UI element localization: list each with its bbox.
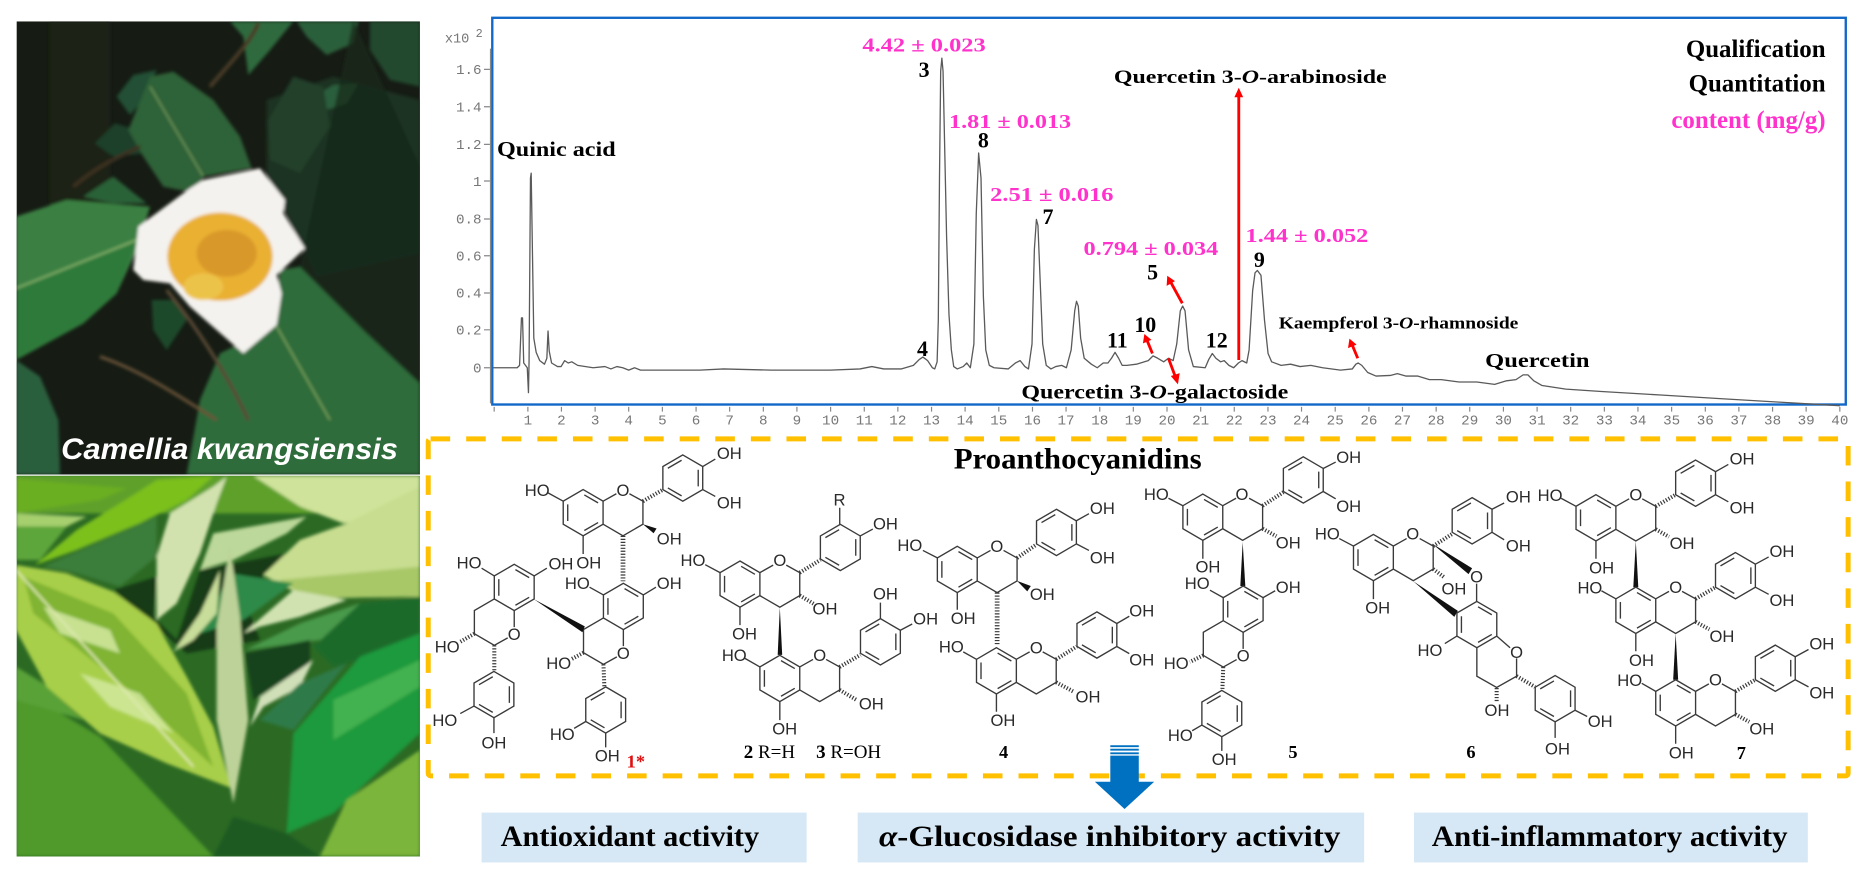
structure 6: OH (1442, 579, 1466, 598)
structure 2 and 3: OH (813, 599, 837, 618)
x axis: 36 (1697, 414, 1714, 430)
structure 1: OH (576, 554, 601, 573)
structure 5: OH (1212, 750, 1237, 769)
x axis: 25 (1327, 414, 1344, 430)
structure 1 (432, 444, 742, 772)
y axis: 1 (473, 175, 482, 191)
compound labels: 7 (1043, 204, 1054, 229)
structure 5: OH (1276, 534, 1301, 553)
x axis: 40 (1831, 414, 1848, 430)
structure 1: HO (435, 637, 460, 656)
x axis: 7 (725, 414, 734, 430)
x axis: 38 (1764, 414, 1781, 430)
structure 4: HO (939, 637, 964, 656)
structure 5: O (1236, 485, 1249, 504)
structure 1: O (617, 644, 630, 663)
structure 5: HO (1185, 574, 1210, 593)
panel: proanthocyanidins (428, 439, 1848, 776)
y axis: 0.8 (456, 213, 482, 229)
x axis: 2 (557, 414, 566, 430)
legend: qualification quantitation content: Quantitation (1689, 70, 1826, 97)
structure 1: HO (432, 711, 457, 730)
arrow: arabinoside (1234, 88, 1243, 360)
x axis: 13 (923, 414, 940, 430)
structure 4: OH (991, 711, 1015, 730)
structure 1: HO (525, 481, 550, 500)
compound labels: 4 (917, 336, 928, 361)
structure 7: OH (1770, 542, 1794, 561)
structure 2 and 3: OH (772, 719, 797, 738)
x axis: 32 (1562, 414, 1579, 430)
compound number 7: 7 (1737, 743, 1746, 763)
x axis: 20 (1158, 414, 1176, 430)
arrow: compound 10 (1143, 334, 1152, 354)
compound labels: 8 (978, 128, 989, 153)
structure 7: HO (1577, 578, 1602, 597)
activity box: anti-inflammatory (1414, 813, 1808, 862)
structure 4 (897, 499, 1154, 762)
structure 7 (1538, 449, 1834, 763)
content values: 2.51 ± 0.016 (990, 184, 1114, 206)
x axis (494, 407, 1848, 430)
structure 7: OH (1809, 683, 1834, 702)
structure 4: OH (1076, 688, 1100, 707)
structure 4: OH (951, 609, 976, 628)
structure 4: OH (1090, 548, 1115, 567)
structure 4: OH (1129, 650, 1154, 669)
structure 6: OH (1545, 739, 1570, 758)
activity box: antioxidant (482, 813, 807, 862)
x axis: 22 (1226, 414, 1243, 430)
structure 4: OH (1030, 585, 1055, 604)
structure 5: O (1237, 646, 1250, 665)
structure 7: OH (1730, 449, 1755, 468)
x axis: 9 (793, 414, 801, 430)
x axis: 19 (1125, 414, 1142, 430)
structure 7: OH (1709, 627, 1734, 646)
compound labels: 9 (1254, 247, 1265, 272)
x axis: 24 (1293, 414, 1310, 430)
activity box: antioxidant: Antioxidant activity (501, 821, 760, 853)
y axis: 1.2 (456, 138, 482, 154)
x axis: 5 (658, 414, 667, 430)
compound labels: Quercetin 3- O-arabinoside (1114, 67, 1387, 88)
structure 7: OH (1749, 719, 1774, 738)
content values: 1.81 ± 0.013 (949, 111, 1071, 133)
structure 4: OH (1129, 602, 1154, 621)
arrow: galactoside (1168, 358, 1180, 384)
structure 6: OH (1365, 598, 1390, 617)
compound numbers 2 and 3: 2 R=H (744, 742, 795, 763)
x axis: 6 (692, 414, 700, 430)
structure 6: O (1470, 567, 1483, 586)
x axis: 11 (856, 414, 873, 430)
structure 6: OH (1506, 537, 1531, 556)
x axis: 29 (1461, 414, 1478, 430)
caption: species name: Camellia kwangsiensis (61, 433, 398, 466)
structure 7: O (1669, 578, 1682, 597)
structure 2 and 3: OH (873, 514, 898, 533)
x axis: 33 (1596, 414, 1613, 430)
structure 6: HO (1315, 524, 1340, 543)
x axis: 3 (591, 414, 599, 430)
y axis (445, 27, 491, 403)
structure 5 (1144, 448, 1361, 769)
structure 2 and 3: OH (859, 694, 884, 713)
photo: tea leaves (16, 475, 420, 856)
x axis: 39 (1798, 414, 1815, 430)
structure 2 and 3: HO (722, 646, 747, 665)
compound labels: 10 (1134, 312, 1156, 337)
structure 5: OH (1336, 448, 1361, 467)
compound labels: Quercetin (1485, 350, 1590, 372)
x axis: 26 (1360, 414, 1377, 430)
structure 7: OH (1589, 559, 1614, 578)
compound labels: Kaempferol 3- O-rhamnoside (1279, 314, 1518, 333)
activity box: alpha-glucosidase: α-Glucosidase inhibitory activity (879, 821, 1341, 853)
x axis: 15 (990, 414, 1007, 430)
compound labels: 3 (919, 57, 930, 82)
y axis: 2 (476, 27, 483, 41)
compound number 6: 6 (1466, 742, 1476, 762)
x axis: 14 (957, 414, 974, 430)
x axis: 1 (524, 414, 532, 430)
structure 7: OH (1669, 744, 1694, 763)
compound numbers 2 and 3 (744, 742, 881, 763)
content values: 0.794 ± 0.034 (1083, 238, 1218, 260)
y axis: 1.4 (456, 101, 482, 117)
structure 6: OH (1506, 488, 1531, 507)
structure 1: HO (565, 574, 590, 593)
y axis: x10 (445, 33, 469, 48)
x axis: 23 (1259, 414, 1276, 430)
structure 5: OH (1336, 497, 1361, 516)
compound labels (497, 57, 1590, 403)
x axis: 12 (889, 414, 906, 430)
structure 6: O (1510, 643, 1523, 662)
structure 2 and 3 (681, 490, 938, 763)
structure 1: O (617, 481, 630, 500)
structure 5: HO (1164, 654, 1189, 673)
activity box: anti-inflammatory: Anti-inflammatory activity (1432, 821, 1788, 853)
heading: Proanthocyanidins (954, 444, 1202, 476)
y axis: 0.4 (456, 287, 482, 303)
arrow: blue down arrow (1095, 746, 1154, 809)
compound labels: 5 (1147, 259, 1158, 284)
x axis: 35 (1663, 414, 1680, 430)
structure 7: HO (1538, 486, 1563, 505)
panel frame dashed (428, 439, 1848, 776)
structure 6: O (1406, 524, 1419, 543)
x axis: 21 (1192, 414, 1209, 430)
x axis: 10 (822, 414, 839, 430)
compound labels: Quercetin 3- O-galactoside (1021, 381, 1288, 403)
structure 2 and 3: OH (873, 584, 898, 603)
structure 5: OH (1276, 578, 1301, 597)
x axis: 37 (1730, 414, 1747, 430)
structure 2 and 3: R (833, 490, 845, 509)
structure 7: OH (1809, 634, 1834, 653)
structure 6: HO (1418, 641, 1443, 660)
y axis: 1.6 (456, 63, 482, 79)
x axis: 16 (1024, 414, 1041, 430)
content values: 1.44 ± 0.052 (1246, 225, 1368, 247)
structure 7: OH (1730, 499, 1755, 518)
activity box: alpha-glucosidase (858, 813, 1364, 862)
structure 2 and 3: O (773, 551, 786, 570)
x axis: 27 (1394, 414, 1411, 430)
x axis: 31 (1529, 414, 1546, 430)
compound number 5: 5 (1288, 742, 1298, 762)
structure 1: O (508, 625, 521, 644)
structure 7: O (1709, 671, 1722, 690)
compound labels: 11 (1107, 328, 1128, 353)
photo: Camellia kwangsiensis flower (16, 20, 420, 475)
legend: qualification quantitation content: Qualification (1686, 36, 1826, 63)
legend: qualification quantitation content (1671, 36, 1826, 134)
structure 6: OH (1588, 712, 1613, 731)
structure 1: OH (657, 530, 682, 549)
structure 2 and 3: OH (913, 609, 938, 628)
y axis: 0.2 (456, 324, 482, 340)
content values: 4.42 ± 0.023 (862, 35, 986, 57)
content values (862, 35, 1368, 260)
structure 7: HO (1617, 671, 1642, 690)
structure 5: HO (1144, 485, 1169, 504)
x axis: 30 (1495, 414, 1512, 430)
x axis: 4 (624, 414, 633, 430)
compound numbers 2 and 3: 3 R=OH (816, 742, 881, 763)
x axis: 18 (1091, 414, 1108, 430)
structure 2 and 3: OH (732, 624, 757, 643)
chart: chromatogram trace (493, 58, 1840, 406)
structure 2 and 3: O (813, 646, 826, 665)
structure 1: HO (546, 654, 571, 673)
structure 2 and 3: HO (681, 551, 706, 570)
compound number 4: 4 (999, 742, 1008, 762)
y axis: 0 (473, 361, 482, 377)
compound number 1*: 1* (627, 752, 645, 772)
structure 1: OH (717, 444, 742, 463)
x axis: 8 (759, 414, 768, 430)
structure 7: OH (1629, 651, 1654, 670)
structure 1: OH (595, 747, 620, 766)
structure 1: HO (550, 725, 575, 744)
compound labels: Quinic acid (497, 139, 616, 161)
x axis: 34 (1629, 414, 1646, 430)
y axis: 0.6 (456, 250, 482, 266)
structure 6: OH (1485, 701, 1509, 720)
structure 5: OH (1195, 558, 1220, 577)
structure 7: OH (1770, 591, 1794, 610)
structure 1: OH (717, 493, 742, 512)
arrow: compound 5 (1167, 276, 1182, 303)
structure 4: HO (897, 536, 922, 555)
x axis: 28 (1428, 414, 1445, 430)
legend: qualification quantitation content: content (mg/g) (1671, 107, 1826, 134)
structure 7: OH (1670, 534, 1695, 553)
structure 1: OH (657, 574, 682, 593)
structure 6 (1315, 488, 1613, 762)
structure 4: O (1030, 639, 1043, 658)
structure 5: HO (1168, 726, 1193, 745)
structure 7: O (1629, 486, 1642, 505)
panel: chromatogram (445, 18, 1848, 430)
structure 1: HO (457, 554, 482, 573)
compound labels: 12 (1206, 328, 1228, 353)
structure 1: OH (549, 554, 573, 573)
panel frame (492, 18, 1846, 405)
structure 4: OH (1090, 499, 1115, 518)
x axis: 17 (1058, 414, 1075, 430)
arrow: kaempferol (1348, 339, 1358, 358)
structure 4: O (990, 537, 1003, 556)
structure 1: OH (481, 734, 506, 753)
